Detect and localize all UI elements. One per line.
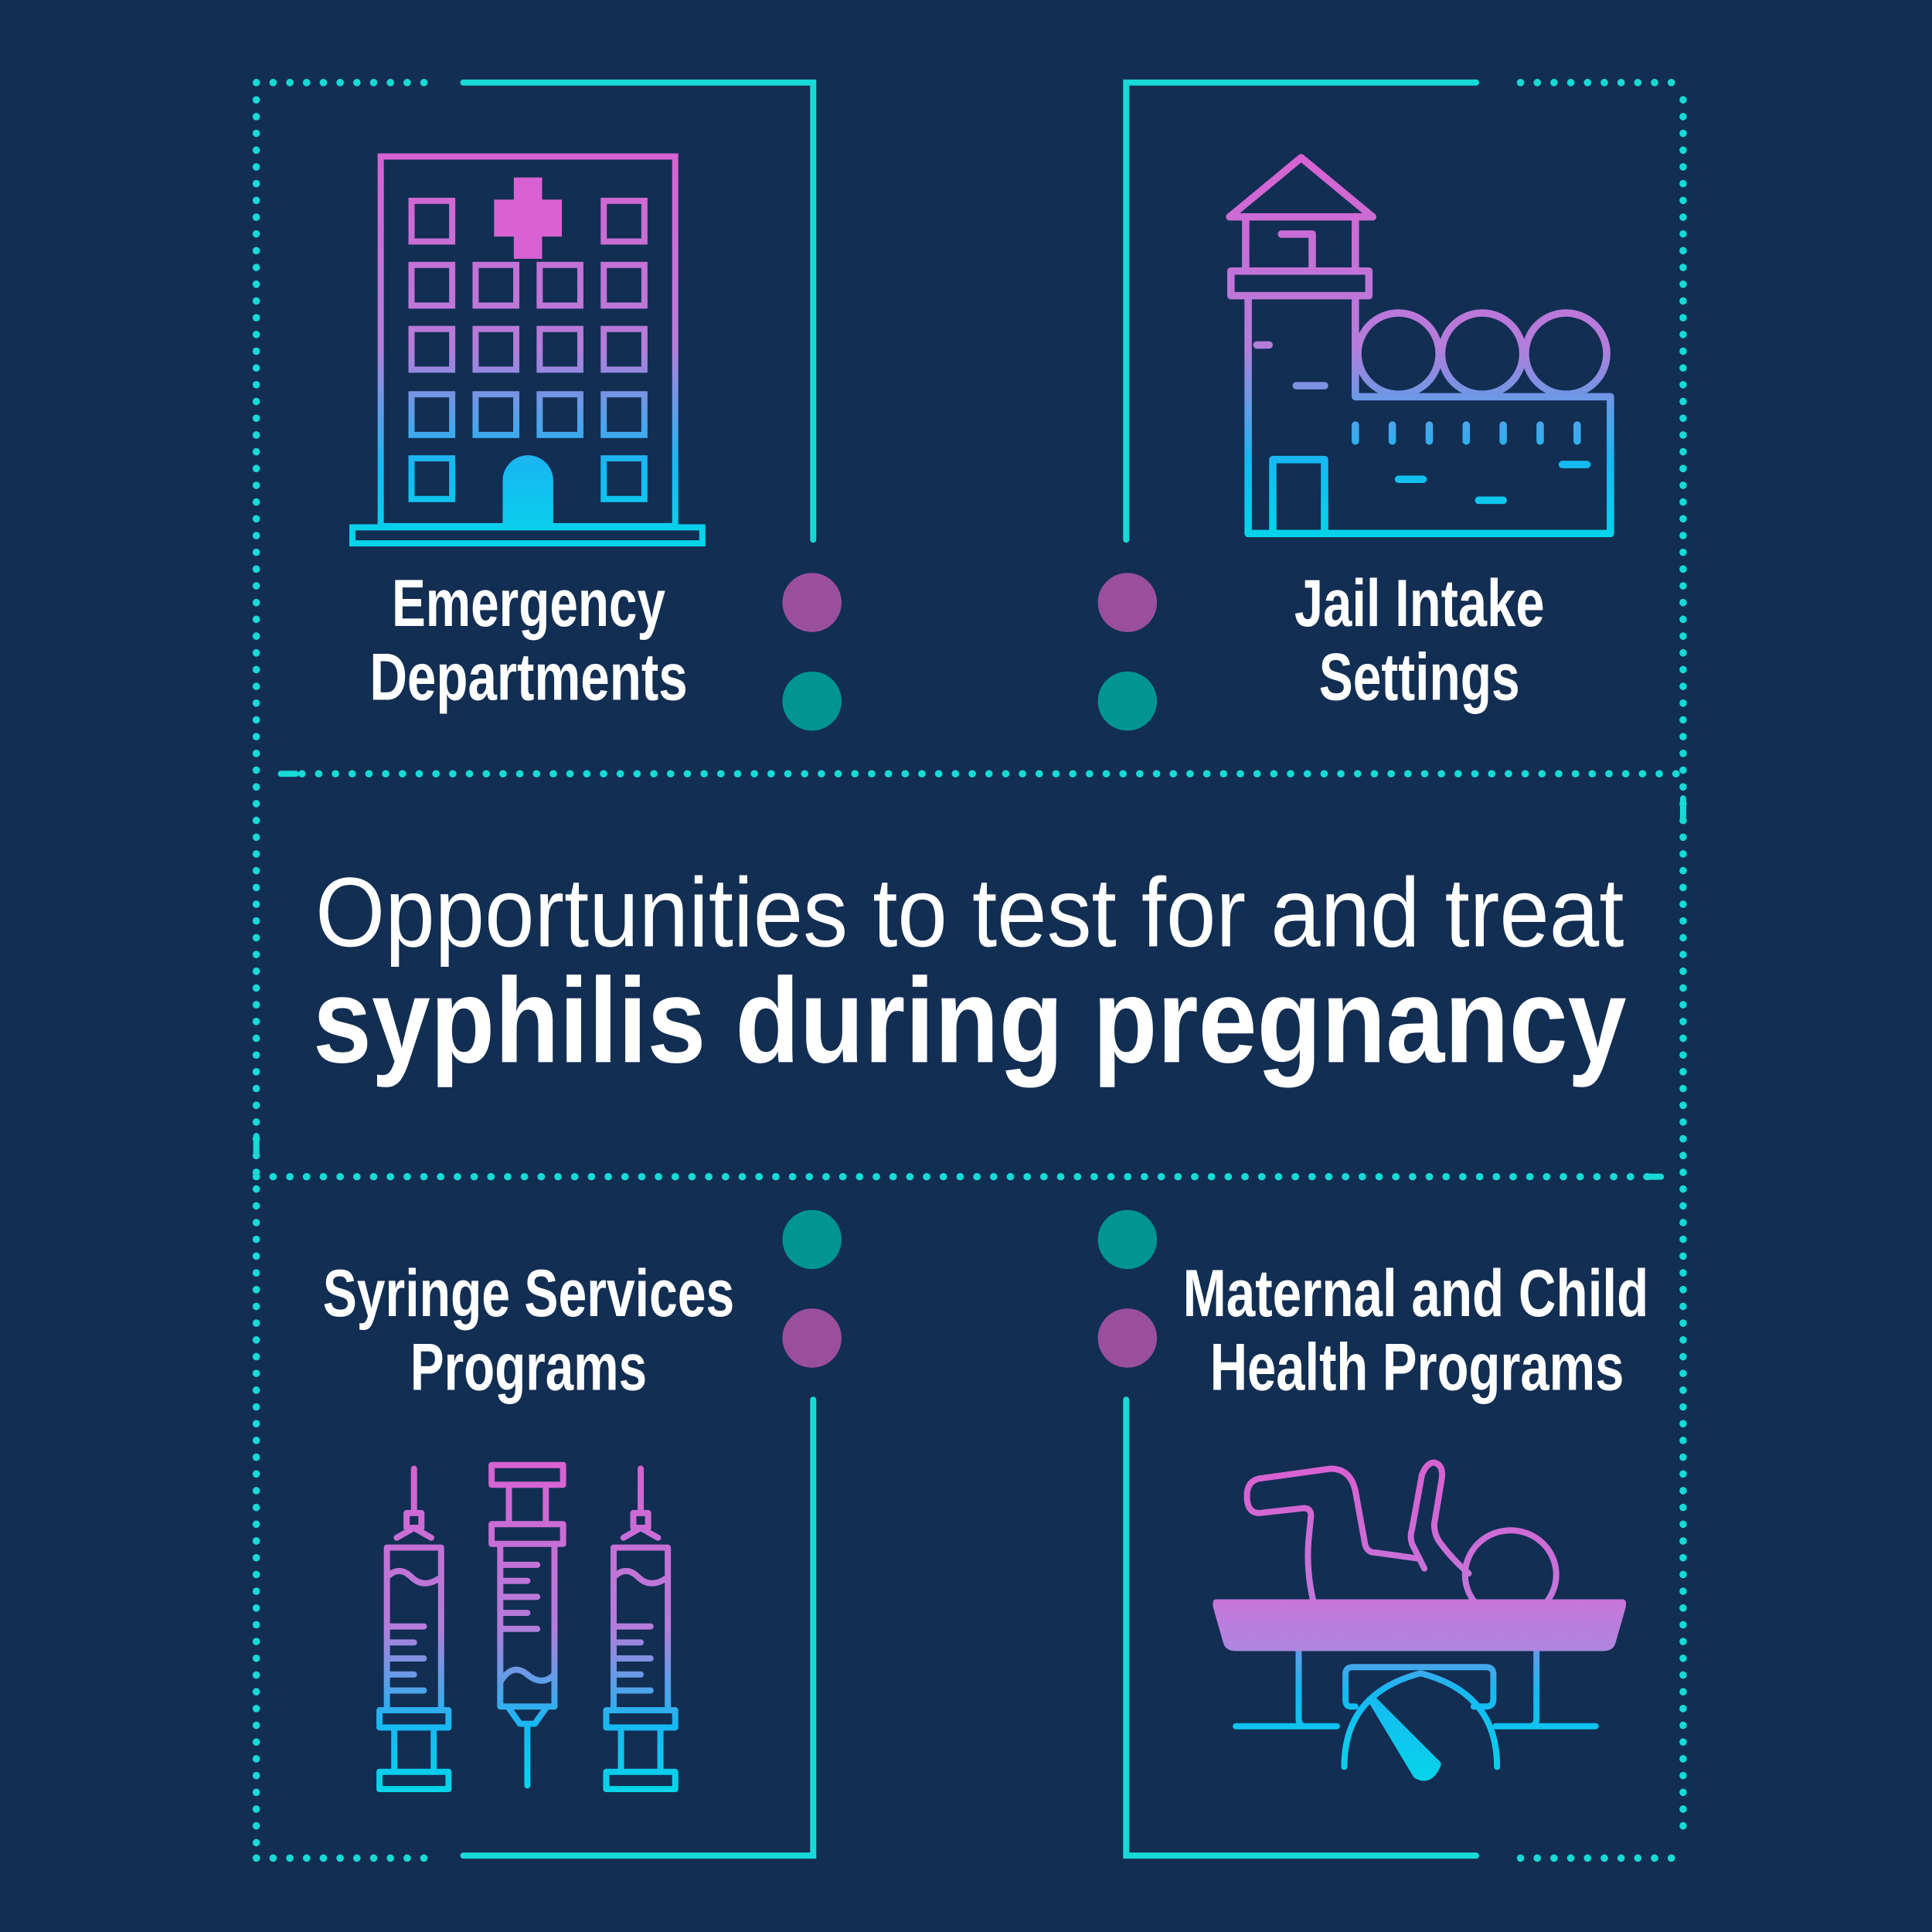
label: Maternal and Child Health Programs: Health Programs — [1210, 1330, 1624, 1404]
icon: jail — [1230, 158, 1611, 533]
label: Maternal and Child Health Programs — [1183, 1257, 1648, 1404]
frame lines — [257, 83, 1683, 1858]
label: Emergency Departments: Departments — [369, 641, 688, 715]
label: Emergency Departments — [369, 566, 688, 715]
connector dots — [782, 573, 1157, 1368]
label: Jail Intake Settings: Jail Intake — [1294, 566, 1545, 641]
icon: syringes — [379, 1465, 675, 1789]
title: syphilis during pregnancy — [313, 954, 1627, 1088]
icon: maternal delivery bed — [1213, 1463, 1626, 1777]
label: Syringe Services Programs — [323, 1257, 734, 1404]
label: Jail Intake Settings — [1294, 566, 1545, 715]
label: Emergency Departments: Emergency — [392, 566, 665, 641]
icon: hospital — [352, 156, 702, 543]
label: Maternal and Child Health Programs: Maternal and Child — [1183, 1257, 1648, 1331]
title — [313, 858, 1627, 1088]
label: Syringe Services Programs: Programs — [410, 1330, 647, 1404]
label: Syringe Services Programs: Syringe Services — [323, 1257, 734, 1331]
label: Jail Intake Settings: Settings — [1319, 641, 1520, 715]
title: Opportunities to test for and treat — [315, 858, 1624, 968]
